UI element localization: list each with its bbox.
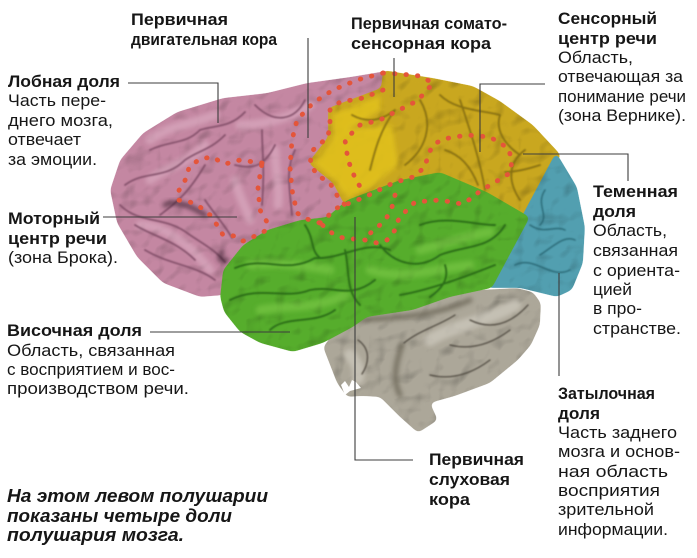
bright yellow somatosensory area xyxy=(314,96,398,198)
label: primary auditory cortex xyxy=(429,451,524,509)
leader line: primary motor cortex xyxy=(307,38,309,138)
label: sensory speech center: Сенсорный xyxy=(558,10,657,28)
leader line: primary auditory cortex xyxy=(355,217,413,460)
label: frontal lobe: днего мозга, xyxy=(8,112,113,130)
label: sensory speech center: Область, xyxy=(558,49,633,67)
label: frontal lobe: отвечает xyxy=(8,131,81,149)
label: motor speech center: (зона Брока). xyxy=(8,249,118,267)
label: occipital lobe: ная область xyxy=(558,463,668,481)
label: temporal lobe: Область, связанная xyxy=(7,342,175,360)
label: parietal lobe: в про- xyxy=(593,300,642,318)
label: parietal lobe: с ориента- xyxy=(593,262,680,280)
occipital lobe, blue xyxy=(485,152,585,297)
label: temporal lobe: Височная доля xyxy=(7,322,142,340)
label: sensory speech center: (зона Вернике). xyxy=(558,107,686,125)
leader line: sensory speech center xyxy=(480,84,545,152)
frontal lobe, pink xyxy=(110,70,392,297)
brain illustration xyxy=(110,70,585,433)
caption xyxy=(7,485,268,545)
label: occipital lobe: восприятия xyxy=(558,482,660,500)
label: parietal lobe: Теменная xyxy=(593,183,678,201)
sulci folds xyxy=(120,95,575,330)
label: occipital lobe: зрительной xyxy=(558,501,654,519)
label: primary auditory cortex: кора xyxy=(429,491,471,509)
label: occipital lobe: информации. xyxy=(558,521,668,539)
label: primary motor cortex: Первичная xyxy=(131,11,228,29)
label: temporal lobe: производством речи. xyxy=(7,380,189,398)
label: occipital lobe: Затылочная xyxy=(558,385,655,403)
temporal lobe, green xyxy=(220,172,530,352)
label: parietal lobe xyxy=(593,183,681,338)
label: parietal lobe: связанная xyxy=(593,242,678,260)
label: parietal lobe: доля xyxy=(593,203,636,221)
label: frontal lobe: за эмоции. xyxy=(8,151,97,169)
dotted outline: primary motor cortex xyxy=(290,73,383,223)
label: primary auditory cortex: Первичная xyxy=(429,451,524,469)
label: primary somatosensory cortex: Первичная сомато- xyxy=(351,15,507,33)
parietal lobe, yellow xyxy=(308,70,561,220)
label: frontal lobe xyxy=(8,73,120,169)
label: occipital lobe: доля xyxy=(558,405,600,423)
label: frontal lobe: Часть пере- xyxy=(8,92,106,110)
label: primary motor cortex: двигательная кора xyxy=(131,31,278,49)
label: motor speech center xyxy=(8,210,118,267)
dotted outline: primary somatosensory cortex xyxy=(345,73,433,190)
label: parietal lobe: цией xyxy=(593,281,632,299)
label: motor speech center: Моторный xyxy=(8,210,100,228)
label: sensory speech center xyxy=(558,10,686,125)
dotted outline: Broca motor speech area xyxy=(178,157,267,241)
label: occipital lobe: мозга и основ- xyxy=(558,443,680,461)
label: sensory speech center: отвечающая за xyxy=(558,68,684,86)
label: sensory speech center: центр речи xyxy=(558,30,657,48)
leader line: primary somatosensory cortex xyxy=(393,58,395,97)
label: primary motor cortex xyxy=(131,11,278,49)
caption: полушария мозга. xyxy=(7,524,184,545)
dotted outline: Wernicke sensory speech area xyxy=(320,135,512,243)
leader line: parietal lobe xyxy=(523,154,628,181)
label: occipital lobe xyxy=(558,385,680,539)
label: temporal lobe xyxy=(7,322,189,398)
label: frontal lobe: Лобная доля xyxy=(8,73,120,91)
label: primary somatosensory cortex: сенсорная кора xyxy=(351,35,492,53)
leader line: frontal lobe xyxy=(128,83,218,123)
label: primary auditory cortex: слуховая xyxy=(429,471,510,489)
leader line: motor speech center xyxy=(103,216,237,218)
label: temporal lobe: с восприятием и вос- xyxy=(7,361,175,379)
caption: На этом левом полушарии xyxy=(7,485,268,506)
label: parietal lobe: странстве. xyxy=(593,320,681,338)
leader line: temporal lobe xyxy=(150,331,290,333)
dotted outline: primary auditory cortex xyxy=(365,195,395,240)
leader line: occipital lobe xyxy=(558,273,560,376)
caption: показаны четыре доли xyxy=(7,505,232,526)
label: parietal lobe: Область, xyxy=(593,222,667,240)
label: sensory speech center: понимание речи xyxy=(558,88,686,106)
label: motor speech center: центр речи xyxy=(8,230,107,248)
label: primary somatosensory cortex xyxy=(351,15,507,53)
label: occipital lobe: Часть заднего xyxy=(558,424,677,442)
brain stem and cerebellum xyxy=(323,288,541,433)
